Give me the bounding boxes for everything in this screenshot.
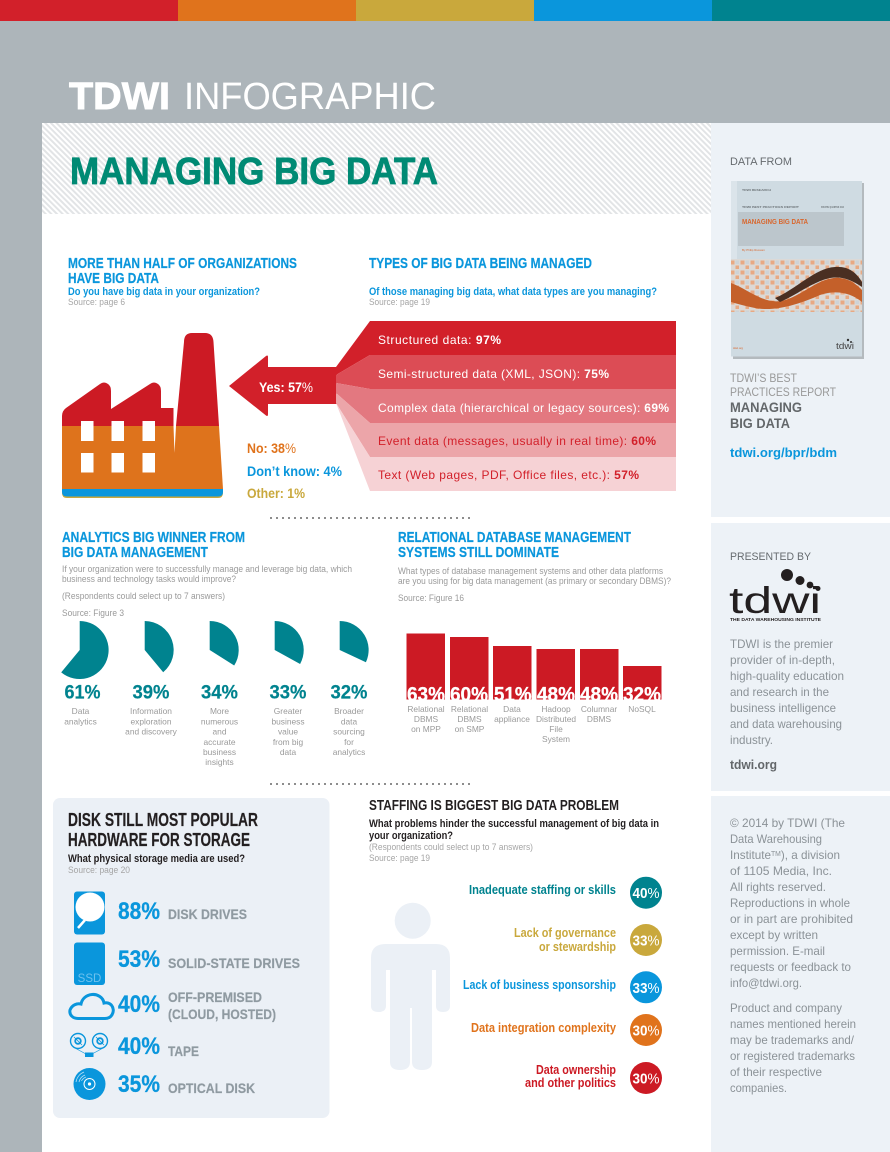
pie: 34% insights: accurate <box>203 737 236 747</box>
pie: 61% data analytics: Data <box>72 706 90 716</box>
panel: have big data heading <box>68 256 297 307</box>
report cover: tdwi.org <box>733 346 743 350</box>
panel: disk storage <box>53 798 330 1118</box>
chart: DBMS bar chart: DBMS <box>457 714 482 724</box>
sidebar: copyright: TM <box>771 851 781 858</box>
sidebar: copyright: or in part are prohibited <box>730 912 853 926</box>
header: TDWI Infographic <box>69 76 436 118</box>
chart: DBMS bar chart: 63% <box>407 684 445 706</box>
report cover <box>731 181 864 359</box>
pie: 39% information exploration: 39% <box>132 682 170 704</box>
problem: sponsorship 33%: Lack of business sponsorship <box>463 977 616 992</box>
sidebar: data from: tdwi.org/bpr/bdm <box>730 445 837 460</box>
logo: tdwi <box>729 569 822 623</box>
arrow: yes 57%: Yes: 57% <box>259 379 313 395</box>
stat: off-premised: (CLOUD, HOSTED) <box>168 1006 276 1022</box>
panel: types of big data heading: Source: page 19 <box>369 297 430 307</box>
stat: off-premised <box>118 989 276 1022</box>
panel: staffing heading: your organization? <box>369 830 453 842</box>
pie: 33% business value: 33% <box>270 682 307 704</box>
pie: 33% business value: Greater <box>274 706 302 716</box>
sidebar: copyright: Reproductions in whole <box>730 896 850 910</box>
sidebar: data from: BIG DATA <box>730 415 790 431</box>
panel: staffing heading <box>369 797 659 863</box>
storage heading: What physical storage media are used? <box>68 853 245 865</box>
sidebar: copyright: of 1105 Media, Inc. <box>730 864 832 878</box>
chart: DBMS bar chart: Data <box>503 704 521 714</box>
problem: staffing 40%: 40% <box>632 885 660 902</box>
sidebar: presented by: industry. <box>730 733 773 747</box>
pie: 34% insights: insights <box>205 757 234 767</box>
report cover: FOURTH QUARTER 2014 <box>821 206 844 209</box>
panel: staffing heading: Source: page 19 <box>369 853 430 863</box>
legend: other answers: Other: 1% <box>247 485 305 501</box>
stat: optical disk <box>118 1071 255 1098</box>
report cover: TDWI BEST PRACTICES REPORT <box>742 206 800 209</box>
problem: sponsorship 33%: 33% <box>632 980 660 997</box>
sidebar: copyright: Institute <box>730 848 772 862</box>
stat: tape: 40% <box>118 1033 160 1060</box>
storage heading <box>68 810 258 875</box>
problem: sponsorship 33% <box>463 971 662 1003</box>
sidebar: copyright: Product and company <box>730 1001 842 1015</box>
problem: governance 33%: Lack of governance <box>514 925 616 940</box>
sidebar: copyright: companies. <box>730 1081 787 1095</box>
chart: DBMS bar chart: DBMS <box>587 714 612 724</box>
icon: factory <box>62 333 223 498</box>
chart: DBMS bar chart: System <box>542 734 570 744</box>
chart: DBMS bar chart: Columnar <box>581 704 617 714</box>
panel: staffing heading: What problems hinder the successful management of big data in <box>369 818 659 830</box>
sidebar: presented by: provider of in-depth, <box>730 653 835 667</box>
pie: 61% data analytics <box>61 621 109 726</box>
panel: have big data heading: HAVE BIG DATA <box>68 271 159 287</box>
pie: 32% data sourcing <box>330 621 369 757</box>
panel: relational database heading <box>398 530 671 603</box>
logo: tdwi: THE DATA WAREHOUSING INSTITUTE <box>730 617 822 623</box>
sidebar: data from: MANAGING <box>730 399 802 415</box>
sidebar: presented by <box>711 523 890 791</box>
pie: 32% data sourcing: for <box>344 737 354 747</box>
sidebar: copyright: may be trademarks and/ <box>730 1033 855 1047</box>
panel: relational database heading: SYSTEMS STILL DOMINATE <box>398 545 559 561</box>
pie: 33% business value: from big <box>273 737 303 747</box>
pie: 32% data sourcing: 32% <box>330 682 368 704</box>
problem: ownership 30%: and other politics <box>525 1075 616 1090</box>
sidebar: copyright: All rights reserved. <box>730 880 826 894</box>
stat: tape <box>118 1033 199 1060</box>
panel: analytics heading: business and technology tasks would improve? <box>62 574 236 584</box>
icon: tape reels <box>70 1034 108 1057</box>
panel: have big data heading: MORE THAN HALF OF ORGANIZATIONS <box>68 256 297 272</box>
panel: relational database heading: RELATIONAL DATABASE MANAGEMENT <box>398 530 631 546</box>
chart: DBMS bar chart: 48% <box>580 684 618 706</box>
sidebar: copyright <box>711 796 890 1152</box>
panel: relational database heading: are you using for big data management (as primary or secondary DBMS)? <box>398 576 671 586</box>
panel: types of big data heading: TYPES OF BIG DATA BEING MANAGED <box>369 256 592 272</box>
pie: 61% data analytics: 61% <box>64 682 101 704</box>
stat: off-premised: OFF-PREMISED <box>168 989 262 1005</box>
stat: solid-state drives: 53% <box>118 946 160 973</box>
chart: data types funnel: Structured data: 97% <box>378 333 501 347</box>
chart: DBMS bar chart: 32% <box>623 684 661 706</box>
icon: cloud <box>70 994 113 1018</box>
problem: integration 30% <box>471 1014 662 1046</box>
chart: DBMS bar chart: Hadoop <box>541 704 571 714</box>
pie: 34% insights: and <box>213 726 227 736</box>
problem: ownership 30%: 30% <box>632 1070 660 1088</box>
pie: 39% information exploration: and discovery <box>125 726 178 736</box>
stat: solid-state drives <box>118 946 300 973</box>
pie: 33% business value: business <box>271 716 305 726</box>
pie: 34% insights: 34% <box>201 682 238 704</box>
pie: 33% business value: value <box>278 726 298 736</box>
chart: data types funnel: Text (Web pages, PDF, Office files, etc.): 57% <box>378 468 639 482</box>
stat: optical disk: 35% <box>118 1071 160 1098</box>
panel: analytics heading: BIG DATA MANAGEMENT <box>62 545 208 561</box>
chart: DBMS bar chart: NoSQL <box>628 704 656 714</box>
sidebar: copyright: of their respective <box>730 1065 822 1079</box>
panel: types of big data heading <box>369 256 657 307</box>
legend: other answers <box>247 440 342 501</box>
chart: DBMS bar chart: 51% <box>494 684 532 706</box>
chart: DBMS bar chart: appliance <box>494 714 530 724</box>
chart: DBMS bar chart: 60% <box>450 684 488 706</box>
report cover: MANAGING BIG DATA <box>742 219 808 226</box>
icon: person silhouette <box>371 903 450 1070</box>
chart: DBMS bar chart <box>406 634 662 744</box>
chart: DBMS bar chart: File <box>549 724 563 734</box>
panel: analytics heading: Source: Figure 3 <box>62 608 124 618</box>
problem: staffing 40% <box>469 877 662 909</box>
pie: 34% insights <box>201 621 239 767</box>
panel: analytics heading: ANALYTICS BIG WINNER FROM <box>62 530 245 546</box>
chart: data types funnel: Event data (messages, usually in real time): 60% <box>378 434 656 448</box>
problem: governance 33%: 33% <box>632 932 660 950</box>
pie: 33% business value <box>270 621 307 757</box>
report cover: TDWI RESEARCH <box>742 189 771 192</box>
pie: 33% business value: data <box>280 747 296 757</box>
sidebar: copyright: except by written <box>730 928 818 942</box>
pie: 39% information exploration <box>125 621 178 736</box>
pie: 34% insights: numerous <box>201 716 238 726</box>
sidebar: data from: PRACTICES REPORT <box>730 385 837 399</box>
icon: solid-state drive <box>74 942 105 985</box>
problem: staffing 40%: Inadequate staffing or skills <box>469 882 616 897</box>
chart: DBMS bar chart: on MPP <box>411 724 441 734</box>
pie: 32% data sourcing: sourcing <box>333 726 365 736</box>
storage heading: DISK STILL MOST POPULAR <box>68 810 258 830</box>
chart: DBMS bar chart: DBMS <box>414 714 439 724</box>
chart: analytics pies <box>61 621 369 767</box>
sidebar: presented by: business intelligence <box>730 701 836 715</box>
panel: have big data heading: Do you have big data in your organization? <box>68 286 260 298</box>
report cover: tdwi <box>836 341 854 351</box>
problem: ownership 30% <box>525 1062 662 1094</box>
problem: governance 33% <box>514 924 662 956</box>
title band: MANAGING BIG DATA <box>70 151 438 193</box>
arrow: yes 57% <box>229 355 337 416</box>
panel: analytics heading: (Respondents could select up to 7 answers) <box>62 591 225 601</box>
logo: tdwi: tdwi <box>729 580 821 621</box>
legend: other answers: Don’t know: 4% <box>247 463 342 479</box>
chart: DBMS bar chart: Distributed <box>536 714 576 724</box>
pie: 32% data sourcing: analytics <box>333 747 365 757</box>
top colour strip <box>0 0 890 21</box>
sidebar: copyright: © 2014 by TDWI (The <box>730 816 845 830</box>
sidebar: copyright: or registered trademarks <box>730 1049 855 1063</box>
stat: disk drives: DISK DRIVES <box>168 906 247 922</box>
header: TDWI Infographic: TDWI <box>69 76 170 118</box>
stat: solid-state drives: SOLID-STATE DRIVES <box>168 955 300 971</box>
sidebar: copyright: info@tdwi.org. <box>730 976 802 990</box>
pie: 39% information exploration: Information <box>130 706 172 716</box>
chart: DBMS bar chart: Relational <box>451 704 488 714</box>
problem: governance 33%: or stewardship <box>539 939 616 954</box>
pie: 34% insights: business <box>203 747 236 757</box>
sidebar: presented by: and research in the <box>730 685 829 699</box>
report cover: By Philip Russom <box>742 248 765 252</box>
sidebar: copyright: permission. E-mail <box>730 944 825 958</box>
chart: data types funnel: Semi-structured data (XML, JSON): 75% <box>378 367 609 381</box>
pie: 61% data analytics: analytics <box>64 716 97 726</box>
sidebar: copyright: requests or feedback to <box>730 960 851 974</box>
sidebar: presented by: PRESENTED BY <box>730 551 812 563</box>
stat: disk drives: 88% <box>118 898 160 925</box>
sidebar: copyright: ), a division <box>781 848 840 862</box>
chart: DBMS bar chart: 48% <box>537 684 575 706</box>
pie: 32% data sourcing: data <box>341 716 357 726</box>
sidebar: presented by: and data warehousing <box>730 717 842 731</box>
icon: disk drive <box>74 892 105 934</box>
stat: tape: TAPE <box>168 1043 199 1059</box>
chart: data types funnel <box>336 321 676 491</box>
legend: other answers: No: 38% <box>247 440 296 456</box>
icon: optical disk <box>74 1068 106 1100</box>
sidebar: presented by: TDWI is the premier <box>730 637 833 651</box>
chart: DBMS bar chart: on SMP <box>455 724 485 734</box>
panel: staffing heading: (Respondents could select up to 7 answers) <box>369 842 533 852</box>
stat: optical disk: OPTICAL DISK <box>168 1080 255 1096</box>
panel: analytics heading <box>62 530 352 618</box>
sidebar: presented by: tdwi.org <box>730 757 777 772</box>
panel: have big data heading: Source: page 6 <box>68 297 125 307</box>
panel: staffing heading: STAFFING IS BIGGEST BIG DATA PROBLEM <box>369 797 619 814</box>
sidebar: data from: TDWI’S BEST <box>730 371 798 385</box>
sidebar: presented by: high-quality education <box>730 669 844 683</box>
header: TDWI Infographic: INFOGRAPHIC <box>184 76 436 118</box>
icon: solid-state drive: SSD <box>78 973 101 985</box>
panel: relational database heading: What types of database management systems and other data platforms <box>398 566 663 576</box>
chart: data types funnel: Complex data (hierarchical or legacy sources): 69% <box>378 401 669 415</box>
sidebar: copyright: Data Warehousing <box>730 832 822 846</box>
storage heading: HARDWARE FOR STORAGE <box>68 830 250 850</box>
pie: 32% data sourcing: Broader <box>334 706 364 716</box>
stat: off-premised: 40% <box>118 991 160 1018</box>
panel: relational database heading: Source: Figure 16 <box>398 593 464 603</box>
problem: integration 30%: 30% <box>632 1022 660 1040</box>
pie: 34% insights: More <box>210 706 229 716</box>
title band <box>42 123 711 214</box>
sidebar: copyright: names mentioned herein <box>730 1017 856 1031</box>
storage heading: Source: page 20 <box>68 865 130 875</box>
panel: types of big data heading: Of those managing big data, what data types are you managing? <box>369 286 657 298</box>
problem: ownership 30%: Data ownership <box>536 1062 616 1077</box>
pie: 39% information exploration: exploration <box>131 716 172 726</box>
sidebar: data from <box>711 123 890 517</box>
problem: integration 30%: Data integration complexity <box>471 1020 617 1035</box>
stat: disk drives <box>118 898 247 925</box>
panel: analytics heading: If your organization were to successfully manage and leverage big data, which <box>62 564 352 574</box>
chart: DBMS bar chart: Relational <box>407 704 445 714</box>
sidebar: data from: DATA FROM <box>730 156 792 168</box>
